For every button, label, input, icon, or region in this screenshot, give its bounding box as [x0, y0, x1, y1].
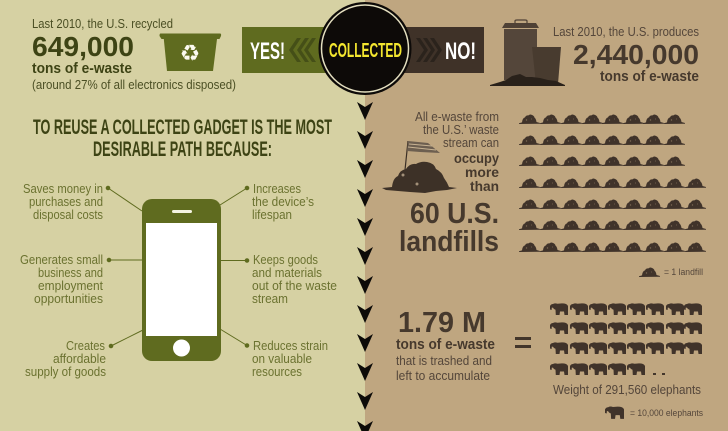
text: reduces strain: on valuable: [252, 352, 312, 366]
produced statistic text: Last 2010, the U.S. produces: [553, 25, 699, 39]
recycled statistic text: (around 27% of all electronics disposed): [32, 78, 236, 92]
icon: smartphone: [142, 199, 221, 361]
text: keeps goods out of waste: stream: [252, 292, 288, 306]
text: keeps goods out of waste: [252, 253, 337, 306]
recycled statistic text: [32, 17, 236, 92]
icon: landfill mound with flag: [382, 141, 457, 193]
icon: trash cans: [490, 20, 565, 86]
text: creates affordable supply: affordable: [53, 352, 106, 366]
text: creates affordable supply: supply of goods: [25, 365, 106, 379]
produced statistic text: 2,440,000: [573, 39, 699, 70]
text: landfill statistic: landfills: [399, 226, 499, 258]
text: reduces strain: Reduces strain: [253, 339, 328, 353]
pictogram: 60 landfills: [519, 114, 706, 252]
panel: trashed side background: [365, 0, 728, 431]
text: generates small business: employment: [38, 279, 103, 293]
legend: 10,000 elephants: [605, 407, 703, 419]
banner: yes / no: YES!: [250, 38, 285, 65]
heading: reuse: [33, 116, 332, 161]
text: generates small business: opportunities: [34, 292, 103, 306]
legend: 10,000 elephants: = 10,000 elephants: [630, 408, 703, 418]
text: generates small business: Generates small: [20, 253, 103, 267]
caption: weight of elephants: Weight of 291,560 elephants: [553, 382, 701, 397]
banner: yes / no: [242, 27, 484, 73]
equals sign: [515, 337, 531, 348]
legend: 1 landfill: [639, 267, 703, 277]
icon: recycling bin: ♻: [180, 41, 200, 67]
connector lines with dots: [106, 186, 249, 348]
pictogram: elephants: [550, 303, 702, 375]
panel: recycled side background: [0, 0, 365, 431]
text: saves money: [23, 182, 103, 222]
text: reduces strain: resources: [252, 365, 302, 379]
text: saves money: purchases and: [29, 195, 103, 209]
heading: reuse: DESIRABLE PATH BECAUSE:: [93, 138, 272, 161]
legend: 1 landfill: = 1 landfill: [664, 267, 703, 277]
badge: collected: COLLECTED: [329, 40, 402, 62]
recycled statistic text: tons of e-waste: [32, 60, 132, 77]
text: increases lifespan: Increases: [253, 182, 301, 196]
text: landfill statistic: than: [470, 178, 499, 194]
text: landfill statistic: stream can: [443, 136, 499, 150]
text: 1.79 M tons: [396, 307, 495, 383]
icon: recycling bin: [160, 34, 221, 71]
text: 1.79 M tons: that is trashed and: [396, 354, 492, 368]
text: generates small business: business and: [38, 266, 103, 280]
text: landfill statistic: occupy: [454, 150, 499, 166]
recycled statistic text: Last 2010, the U.S. recycled: [32, 17, 173, 31]
text: increases lifespan: [252, 182, 314, 222]
text: 1.79 M tons: 1.79 M: [398, 307, 486, 339]
text: 1.79 M tons: left to accumulate: [396, 369, 490, 383]
text: creates affordable supply: Creates: [66, 339, 105, 353]
text: reduces strain: [252, 339, 328, 379]
text: saves money: disposal costs: [33, 208, 103, 222]
text: landfill statistic: All e-waste from: [415, 110, 499, 124]
text: landfill statistic: 60 U.S.: [410, 198, 499, 230]
text: increases lifespan: lifespan: [252, 208, 292, 222]
produced statistic text: [553, 25, 699, 85]
badge: collected: [318, 2, 412, 95]
text: 1.79 M tons: tons of e-waste: [396, 337, 495, 353]
text: keeps goods out of waste: and materials: [252, 266, 322, 280]
text: landfill statistic: the U.S.’ waste: [423, 123, 499, 137]
down arrows along the divider: [357, 102, 373, 431]
text: increases lifespan: the device’s: [252, 195, 314, 209]
text: landfill statistic: more: [465, 164, 499, 180]
text: landfill statistic: [399, 110, 499, 258]
produced statistic text: tons of e-waste: [600, 68, 699, 85]
banner: yes / no: NO!: [445, 38, 476, 65]
heading: reuse: TO REUSE A COLLECTED GADGET IS THE MOST: [33, 116, 332, 139]
text: saves money: Saves money in: [23, 182, 103, 196]
text: creates affordable supply: [25, 339, 106, 379]
text: generates small business: [20, 253, 103, 306]
text: keeps goods out of waste: out of the waste: [252, 279, 337, 293]
text: keeps goods out of waste: Keeps goods: [253, 253, 318, 267]
recycled statistic text: 649,000: [32, 31, 134, 62]
